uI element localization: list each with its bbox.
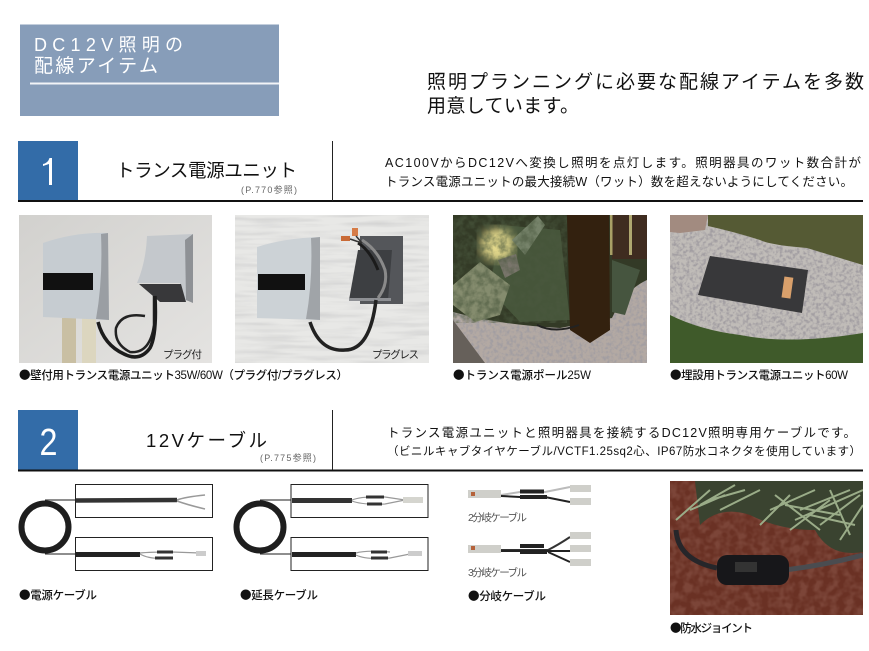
photo: buried transformer unit on gravel bbox=[670, 215, 863, 363]
page reference: (P.775参照) bbox=[260, 452, 316, 463]
title text: DC12V照明の bbox=[34, 35, 183, 55]
label: plugless type: プラグレス bbox=[372, 348, 419, 361]
number badge 1 bbox=[18, 141, 78, 201]
photo: waterproof joint bbox=[670, 481, 863, 615]
number badge 1: 1 bbox=[47, 184, 48, 186]
caption: wall transformer: ●壁付用トランス電源ユニット35W/60W（プラグ付/プラグレス） bbox=[19, 367, 348, 383]
photo: transformer pole in garden bbox=[453, 215, 647, 363]
section 2 header bbox=[18, 410, 863, 472]
intro text bbox=[427, 71, 864, 117]
photo: wall transformer units with plug bbox=[19, 215, 212, 363]
section 1 header bbox=[18, 141, 863, 202]
section 2 description bbox=[387, 425, 861, 458]
intro text: 用意しています。 bbox=[427, 95, 579, 117]
section 1 description: AC100VからDC12Vへ変換し照明を点灯します。照明器具のワット数合計が bbox=[385, 155, 861, 170]
illustration: three-way branch cable bbox=[468, 532, 591, 579]
section 1 description: トランス電源ユニットの最大接続W（ワット）数を超えないようにしてください。 bbox=[385, 174, 853, 189]
caption: power cable: ●電源ケーブル bbox=[19, 587, 98, 603]
section 2 heading: 12Vケーブル bbox=[146, 430, 267, 451]
title panel bbox=[20, 24, 279, 116]
photo: wall transformer units plugless bbox=[235, 215, 429, 363]
illustration: extension cable bbox=[236, 484, 428, 570]
page reference: (P.770参照) bbox=[241, 184, 297, 195]
section 1 description bbox=[385, 155, 861, 189]
illustration: power cable bbox=[22, 484, 212, 570]
section 1 heading: トランス電源ユニット bbox=[116, 160, 297, 181]
caption: extension cable: ●延長ケーブル bbox=[240, 587, 318, 603]
number badge 2: 2 bbox=[40, 422, 57, 464]
label: three-way: 3分岐ケーブル bbox=[468, 566, 527, 579]
caption: transformer pole: ●トランス電源ポール25W bbox=[453, 367, 591, 383]
intro text: 照明プランニングに必要な配線アイテムを多数 bbox=[427, 71, 864, 93]
title text: 配線アイテム bbox=[34, 55, 158, 77]
illustration: two-way branch cable bbox=[468, 485, 591, 524]
section 2 description: トランス電源ユニットと照明器具を接続するDC12V照明専用ケーブルです。 bbox=[387, 425, 856, 440]
title text bbox=[34, 35, 183, 77]
caption: branch cable: ●分岐ケーブル bbox=[468, 588, 546, 604]
section 2 description: （ビニルキャブタイヤケーブル/VCTF1.25sq2心、IP67防水コネクタを使用しています） bbox=[387, 444, 861, 458]
caption: buried transformer: ●埋設用トランス電源ユニット60W bbox=[670, 367, 848, 383]
label: plug type: プラグ付 bbox=[163, 348, 202, 361]
label: two-way: 2分岐ケーブル bbox=[468, 511, 527, 524]
number badge 2 bbox=[18, 410, 78, 470]
caption: waterproof joint: ●防水ジョイント bbox=[670, 620, 753, 636]
